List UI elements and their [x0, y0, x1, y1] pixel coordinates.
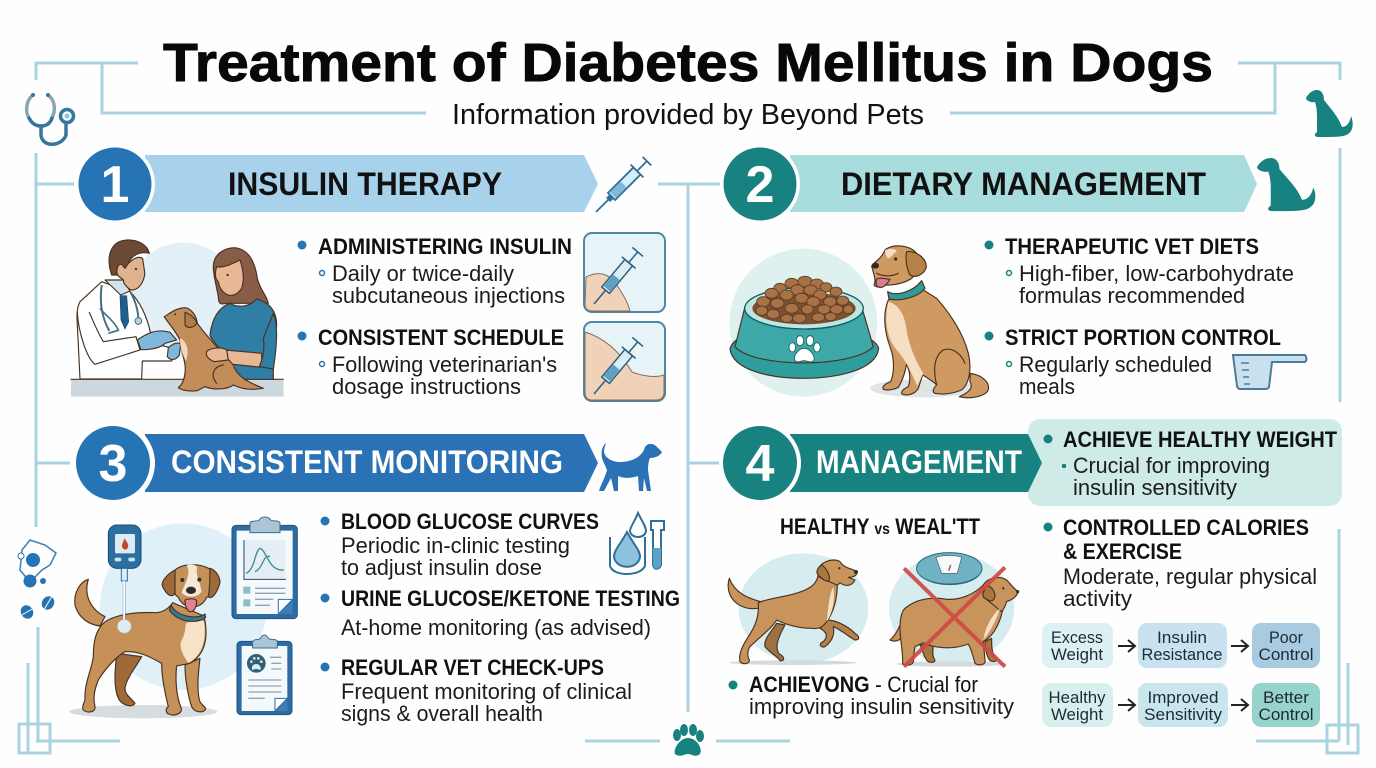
bullet: controlled calories and exercise: activity — [1063, 586, 1133, 611]
bullet: consistent schedule: Following veterinarian's — [332, 352, 557, 377]
bullet: strict portion control: STRICT PORTION CONTROL — [1005, 325, 1281, 350]
section 3: consistent monitoring — [69, 421, 680, 726]
bullet: consistent schedule — [298, 325, 564, 399]
banner 4 — [719, 422, 1042, 504]
vet — [77, 282, 175, 379]
flow chart: excess weight: Resistance — [1142, 646, 1222, 664]
icon: clipboard glucose curve — [232, 517, 297, 619]
bullet: administering insulin: subcutaneous injections — [332, 283, 565, 308]
bullet: blood glucose curves: BLOOD GLUCOSE CURVES — [341, 509, 599, 534]
bullet: regular vet check-ups — [320, 655, 632, 726]
illustration: overweight dog crossed out — [889, 553, 1019, 667]
owner — [213, 248, 268, 304]
banner 1: 1 — [101, 156, 129, 214]
illustration: food bowl — [729, 249, 879, 397]
flow chart: healthy weight: Control — [1258, 706, 1314, 724]
bullet: therapeutic vet diets: THERAPEUTIC VET DIETS — [1005, 234, 1259, 259]
icon: water drops and test tube — [610, 513, 664, 574]
icon: molecules and pills — [18, 540, 57, 621]
bullet: regular vet check-ups: signs & overall health — [341, 701, 543, 726]
bullet: achieving — [728, 672, 1015, 719]
icon: standing dog — [599, 443, 662, 491]
flow chart: excess weight: Excess — [1051, 629, 1103, 647]
bullet: administering insulin — [298, 234, 572, 308]
banner 3 — [71, 421, 598, 505]
flow chart: excess weight: Weight — [1051, 646, 1103, 664]
image card: injection 1 — [584, 233, 665, 312]
heading: healthy vs weight: HEALTHY vs WEAL'TT — [780, 514, 980, 539]
icon: paw bottom center — [673, 724, 704, 756]
illustration: healthy dog — [728, 553, 868, 665]
banner 3: CONSISTENT MONITORING — [171, 444, 563, 480]
flow chart: healthy weight: Healthy — [1048, 689, 1106, 707]
bullet: therapeutic vet diets — [984, 234, 1294, 308]
icon: syringe header — [590, 155, 653, 218]
banner 1: INSULIN THERAPY — [228, 166, 502, 202]
flow chart: excess weight: Insulin — [1157, 629, 1207, 647]
flow chart: healthy weight: Improved — [1148, 689, 1218, 707]
bullet: urine glucose ketone testing — [320, 586, 680, 640]
flow chart: excess weight: Poor — [1269, 629, 1303, 647]
flow chart: excess weight: Control — [1258, 646, 1314, 664]
bullet: urine glucose ketone testing: At-home monitoring (as advised) — [341, 615, 651, 640]
bullet: controlled calories and exercise: Moderate, regular physical — [1063, 564, 1317, 589]
banner 3: 3 — [99, 435, 127, 493]
banner 2 — [720, 144, 1257, 224]
small dog — [164, 308, 263, 391]
achieve healthy weight panel: Crucial for improving — [1073, 453, 1270, 478]
bullet: administering insulin: Daily or twice-daily — [332, 261, 515, 286]
bullet: strict portion control — [984, 325, 1281, 399]
bullet: consistent schedule: dosage instructions — [332, 374, 521, 399]
achieve healthy weight panel — [1028, 419, 1342, 506]
bullet: regular vet check-ups: Frequent monitoring of clinical — [341, 679, 632, 704]
bullet: urine glucose ketone testing: URINE GLUCOSE/KETONE TESTING — [341, 586, 680, 611]
subtitle: Information provided by Beyond Pets — [452, 99, 924, 131]
bullet: strict portion control: meals — [1019, 374, 1075, 399]
title: Treatment of Diabetes Mellitus in Dogs — [163, 33, 1213, 93]
flow chart: healthy weight: Sensitivity — [1144, 706, 1223, 724]
bullet: therapeutic vet diets: formulas recommended — [1019, 283, 1245, 308]
bullet: regular vet check-ups: REGULAR VET CHECK-UPS — [341, 655, 604, 680]
banner 2: DIETARY MANAGEMENT — [841, 166, 1206, 202]
bullet: achieving: improving insulin sensitivity — [749, 694, 1015, 719]
icon: measuring cup — [1233, 355, 1306, 389]
flow chart: healthy weight: Better — [1263, 689, 1310, 707]
achieve healthy weight panel: insulin sensitivity — [1073, 475, 1238, 500]
icon: clipboard vet record — [237, 635, 292, 715]
glucose meter — [108, 525, 141, 581]
illustration: sitting dog — [870, 246, 989, 398]
flow chart: excess weight — [1042, 623, 1320, 668]
bullet: strict portion control: Regularly scheduled — [1019, 352, 1212, 377]
achieve healthy weight panel: ACHIEVE HEALTHY WEIGHT — [1063, 427, 1337, 452]
icon: sitting dog — [1257, 158, 1315, 211]
bullet: administering insulin: ADMINISTERING INSULIN — [318, 234, 572, 259]
icon: stethoscope — [27, 93, 74, 144]
bullet: consistent schedule: CONSISTENT SCHEDULE — [318, 325, 564, 350]
section 1: insulin therapy — [71, 144, 665, 401]
flow chart: healthy weight: Weight — [1051, 706, 1103, 724]
section 2: dietary management — [720, 144, 1315, 399]
bullet: controlled calories and exercise: & EXERCISE — [1063, 539, 1182, 564]
bullet: blood glucose curves — [320, 509, 599, 580]
bullet: controlled calories and exercise: CONTROLLED CALORIES — [1063, 515, 1309, 540]
banner 4: MANAGEMENT — [816, 444, 1022, 480]
bullet: achieving: ACHIEVONG - Crucial for — [749, 672, 978, 697]
image card: injection 2 — [584, 322, 665, 401]
section 4: management — [719, 419, 1342, 727]
illustration: vet, owner and dog — [71, 240, 284, 397]
bullet: blood glucose curves: to adjust insulin dose — [341, 555, 542, 580]
icon: sitting dog top right — [1306, 90, 1353, 137]
banner 4: 4 — [746, 435, 775, 493]
bullet: blood glucose curves: Periodic in-clinic testing — [341, 533, 570, 558]
banner 1 — [75, 144, 598, 224]
bullet: therapeutic vet diets: High-fiber, low-carbohydrate — [1019, 261, 1294, 286]
flow chart: healthy weight — [1042, 683, 1320, 727]
illustration: dog with glucose meter — [69, 523, 267, 718]
bullet: controlled calories and exercise — [1044, 515, 1317, 611]
banner 2: 2 — [746, 156, 774, 214]
